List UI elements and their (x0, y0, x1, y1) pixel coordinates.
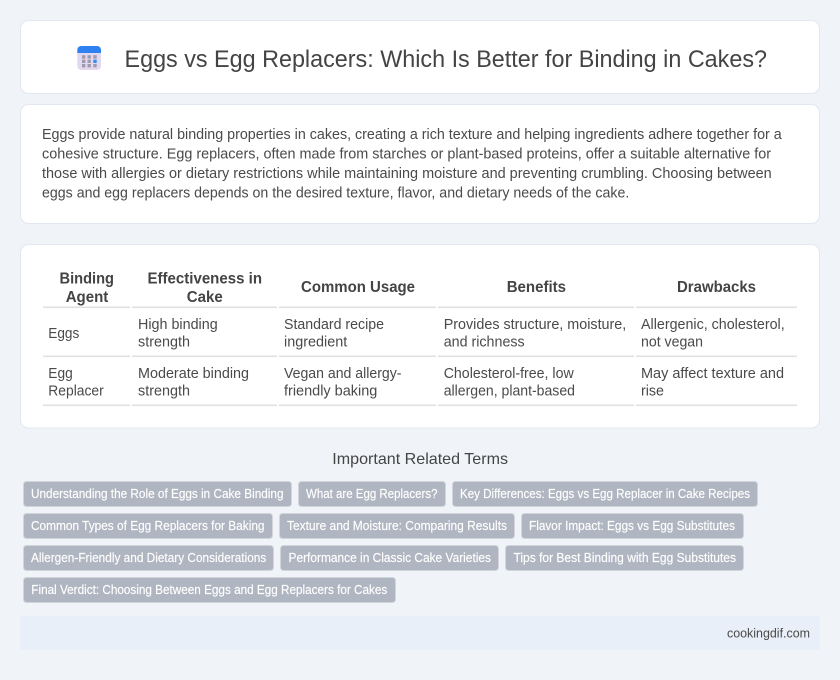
panel: related term tags: Understanding the Role of Eggs in Cake Binding (31, 487, 284, 501)
footer (20, 616, 820, 650)
panel: related term tags: Tips for Best Binding with Egg Substitutes (514, 551, 736, 565)
panel: related term tags: Common Types of Egg Replacers for Baking (31, 519, 264, 533)
table header row: Effectiveness in (148, 270, 262, 288)
table row: egg replacer: Vegan and allergy- (284, 366, 402, 382)
heading: important related terms: Important Related Terms (332, 451, 508, 468)
table row: egg replacer: Cholesterol-free, low (444, 366, 574, 382)
table header row: Drawbacks (677, 279, 756, 296)
panel: related term tags: What are Egg Replacers? (306, 487, 438, 501)
table row: egg replacer: Moderate binding (138, 366, 249, 382)
table row: egg replacer: Replacer (48, 384, 104, 400)
panel: related term tags (24, 482, 758, 602)
table row: eggs: Eggs (48, 326, 79, 342)
table row: eggs: ingredient (284, 335, 347, 351)
table row: eggs (48, 317, 785, 351)
table row: eggs: Allergenic, cholesterol, (641, 317, 785, 333)
text block: intro paragraph (42, 127, 782, 202)
footer: cookingdif.com (727, 625, 810, 640)
panel: comparison table (20, 244, 820, 428)
table row: eggs: Standard recipe (284, 317, 384, 333)
text block: intro paragraph: those with allergies or dietary restrictions while maintaining moisture and preventing crumbling. Choosing between (42, 166, 772, 182)
text block: intro paragraph: Eggs provide natural binding properties in cakes, creating a rich texture and helping ingredients adhere together for a (42, 127, 782, 143)
panel: related term tags: Texture and Moisture: Comparing Results (287, 519, 507, 533)
text block: intro paragraph: cohesive structure. Egg replacers, often made from starches or plant-based proteins, offer a suitable alternative for (42, 146, 771, 162)
table row: egg replacer: allergen, plant-based (444, 384, 575, 400)
panel: related term tags: Final Verdict: Choosing Between Eggs and Egg Replacers for Cakes (31, 583, 387, 597)
table header row: Cake (187, 289, 223, 306)
table header row: Agent (66, 289, 109, 306)
table row: egg replacer: rise (641, 384, 664, 400)
table header row: Common Usage (301, 279, 415, 296)
panel: introduction (20, 104, 820, 224)
panel: related term tags: Allergen-Friendly and Dietary Considerations (31, 551, 266, 565)
panel: related term tags: Key Differences: Eggs vs Egg Replacer in Cake Recipes (460, 487, 750, 501)
icon: calendar (77, 46, 101, 70)
table row: eggs: not vegan (641, 335, 703, 351)
title: Eggs vs Egg Replacers: Which Is Better for Binding in Cakes? (124, 46, 767, 73)
panel: header (20, 20, 820, 94)
table header row (60, 270, 756, 306)
table header row: Binding (60, 270, 114, 288)
table row: egg replacer: May affect texture and (641, 366, 784, 382)
table row: eggs: High binding (138, 317, 218, 333)
table row: egg replacer: strength (138, 384, 190, 400)
table row: egg replacer: Egg (48, 366, 73, 382)
table row: eggs: and richness (444, 335, 525, 351)
table row: eggs: Provides structure, moisture, (444, 317, 626, 333)
text block: intro paragraph: eggs and egg replacers depends on the desired texture, flavor, and dietary needs of the cake. (42, 186, 629, 202)
panel: related term tags: Flavor Impact: Eggs vs Egg Substitutes (529, 519, 735, 533)
table row: egg replacer: friendly baking (284, 384, 377, 400)
table header row: Benefits (507, 279, 566, 296)
panel: related term tags: Performance in Classic Cake Varieties (288, 551, 491, 565)
table row: egg replacer (48, 366, 784, 400)
table row: eggs: strength (138, 335, 190, 351)
